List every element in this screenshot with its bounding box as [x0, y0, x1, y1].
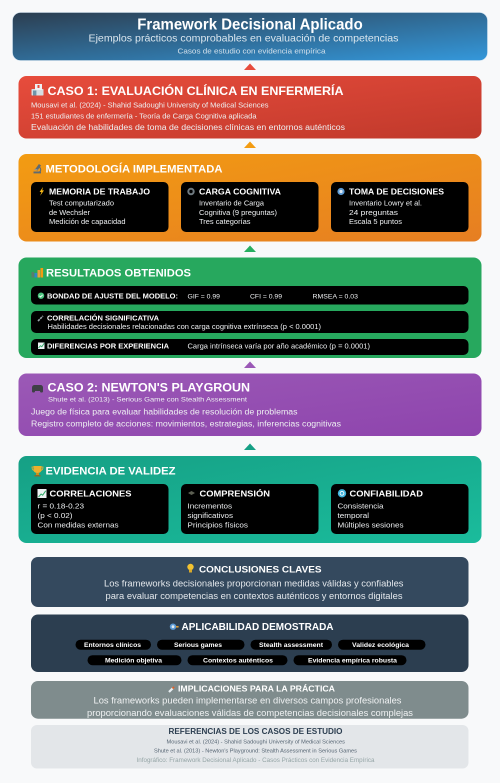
tag row 1: Serious games — [174, 642, 222, 649]
card: memoria de trabajo: de Wechsler — [49, 210, 91, 217]
panel: header — [12, 12, 488, 60]
heading: EVIDENCIA DE VALIDEZ — [46, 466, 176, 478]
icon: light bulb — [187, 564, 194, 572]
card: carga cognitiva: Tres categorías — [199, 219, 251, 226]
icon: trend chart — [38, 342, 44, 349]
card: carga cognitiva: Inventario de Carga — [199, 200, 264, 208]
tag row 2: Contextos auténticos — [203, 657, 273, 664]
footer note: Infográfico: Framework Decisional Aplicado - Casos Prácticos con Evidencia Empírica — [136, 757, 375, 764]
title: Framework Decisional Aplicado — [137, 16, 363, 33]
icon: target — [337, 188, 345, 195]
card: comprension: COMPRENSIÓN — [200, 487, 270, 498]
tag row 1 — [76, 640, 426, 650]
conclusion line 2: para evaluar competencias en contextos auténticos y entornos digitales — [106, 591, 403, 601]
card: confiabilidad — [331, 484, 468, 534]
row: correlacion significativa: CORRELACIÓN SIGNIFICATIVA — [47, 314, 159, 323]
card: confiabilidad: CONFIABILIDAD — [350, 488, 423, 498]
card: toma de decisiones: TOMA DE DECISIONES — [349, 186, 444, 196]
arrow: to evidence — [244, 444, 256, 450]
card: memoria de trabajo: MEMORIA DE TRABAJO — [49, 186, 150, 196]
tag row 1: Entornos clínicos — [84, 642, 141, 649]
panel: caso 1 — [18, 76, 482, 138]
sample: 151 estudiantes de enfermería - Teoría de Carga Cognitiva aplicada — [31, 114, 257, 120]
card: correlaciones: Con medidas externas — [38, 520, 119, 530]
row: correlacion significativa — [31, 311, 468, 333]
card: carga cognitiva: Cognitiva (9 preguntas) — [199, 210, 277, 217]
panel: aplicabilidad demostrada — [31, 614, 468, 672]
row: diferencias por experiencia: Carga intrínseca varía por año académico (p = 0.0001) — [188, 343, 370, 350]
row: bondad de ajuste: CFI = 0.99 — [250, 293, 282, 300]
panel: referencias — [31, 725, 468, 768]
card: carga cognitiva — [181, 182, 318, 232]
card: comprension: significativos — [188, 511, 233, 520]
subtitle: Ejemplos prácticos comprobables en evaluación de competencias — [88, 33, 398, 45]
card: confiabilidad: Múltiples sesiones — [338, 520, 404, 530]
icon: microscope — [34, 164, 41, 173]
heading: CONCLUSIONES CLAVES — [199, 565, 322, 576]
icon: trend chart — [38, 489, 46, 498]
card: memoria de trabajo — [31, 182, 168, 232]
card: toma de decisiones — [331, 182, 468, 232]
card: comprension: Incrementos — [188, 502, 232, 511]
implication line 2: proporcionando evaluaciones válidas de competencias decisionales complejas — [87, 708, 414, 718]
heading: CASO 2: NEWTON'S PLAYGROUN — [48, 381, 250, 395]
card: confiabilidad: Consistencia — [338, 502, 384, 511]
reference 1: Mousavi et al. (2024) - Shahid Sadoughi University of Medical Sciences — [166, 740, 345, 746]
icon: gear — [188, 189, 194, 194]
panel: resultados — [18, 258, 482, 358]
card: toma de decisiones: 24 preguntas — [349, 210, 399, 217]
tag row 1: Stealth assessment — [259, 642, 324, 649]
arrow: to results — [244, 246, 256, 252]
icon: lightning — [40, 187, 44, 196]
heading: CASO 1: EVALUACIÓN CLÍNICA EN ENFERMERÍA — [48, 83, 344, 98]
icon: graduation cap — [188, 491, 195, 495]
heading: APLICABILIDAD DEMOSTRADA — [182, 622, 334, 633]
card: comprension — [181, 484, 318, 534]
panel: metodologia — [18, 154, 482, 242]
icon: bar chart — [32, 268, 43, 278]
card: correlaciones: r = 0.18-0.23 — [38, 502, 84, 511]
icon: trophy — [32, 466, 43, 476]
icon: hospital — [32, 84, 44, 96]
icon: game controller — [32, 385, 43, 392]
caption: Casos de estudio con evidencia empírica — [178, 47, 326, 56]
implication line 1: Los frameworks pueden implementarse en diversos campos profesionales — [94, 696, 402, 706]
panel: caso 2 — [18, 374, 482, 436]
panel: evidencia de validez — [18, 456, 482, 543]
icon: link — [38, 316, 43, 321]
card: carga cognitiva: CARGA COGNITIVA — [199, 186, 281, 196]
icon: repeat — [338, 489, 346, 497]
description line 1: Juego de física para evaluar habilidades de resolución de problemas — [31, 407, 298, 416]
card: correlaciones: (p < 0.02) — [38, 511, 72, 520]
card: toma de decisiones: Inventario Lowry et al. — [349, 200, 422, 208]
description: Evaluación de habilidades de toma de decisiones clínicas en entornos auténticos — [31, 123, 345, 132]
heading: REFERENCIAS DE LOS CASOS DE ESTUDIO — [168, 727, 342, 736]
row: bondad de ajuste — [31, 286, 468, 304]
row: diferencias por experiencia — [31, 339, 468, 355]
row: bondad de ajuste: BONDAD DE AJUSTE DEL MODELO: — [47, 293, 178, 300]
card: correlaciones — [31, 484, 168, 534]
description line 2: Registro completo de acciones: movimientos, estrategias, inferencias cognitivas — [31, 420, 341, 429]
panel: conclusiones claves — [31, 557, 468, 607]
tag row 1: Validez ecológica — [352, 642, 409, 649]
panel: implicaciones para la practica — [31, 681, 468, 719]
tag row 2: Evidencia empírica robusta — [308, 657, 397, 664]
row: bondad de ajuste: GIF = 0.99 — [188, 293, 220, 300]
authors: Shute et al. (2013) - Serious Game con Stealth Assessment — [48, 396, 247, 403]
icon: rocket — [169, 687, 174, 692]
arrow: to methodology — [244, 142, 256, 148]
card: memoria de trabajo: Medición de capacidad — [49, 219, 126, 226]
arrow: to case 1 — [244, 64, 256, 70]
row: diferencias por experiencia: DIFERENCIAS POR EXPERIENCIA — [47, 343, 169, 350]
row: correlacion significativa: Habilidades decisionales relacionadas con carga cognitiva extrínseca (p < 0.0001) — [48, 324, 321, 331]
authors: Mousavi et al. (2024) - Shahid Sadoughi University of Medical Sciences — [31, 102, 269, 109]
card: memoria de trabajo: Test computarizado — [49, 200, 114, 208]
reference 2: Shute et al. (2013) - Newton's Playground: Stealth Assessment in Serious Games — [154, 749, 357, 755]
card: comprension: Principios físicos — [188, 520, 248, 530]
heading: METODOLOGÍA IMPLEMENTADA — [46, 163, 223, 176]
conclusion line 1: Los frameworks decisionales proporcionan medidas válidas y confiables — [104, 579, 404, 589]
arrow: to case 2 — [244, 362, 256, 368]
row: bondad de ajuste: RMSEA = 0.03 — [312, 293, 358, 300]
icon: target — [170, 624, 179, 630]
card: correlaciones: CORRELACIONES — [50, 488, 132, 498]
heading: RESULTADOS OBTENIDOS — [46, 268, 191, 280]
icon: check — [38, 292, 44, 299]
heading: IMPLICACIONES PARA LA PRÁCTICA — [178, 683, 335, 694]
card: confiabilidad: temporal — [338, 511, 369, 520]
tag row 2 — [88, 655, 406, 665]
card: toma de decisiones: Escala 5 puntos — [349, 219, 403, 226]
tag row 2: Medición objetiva — [105, 657, 162, 664]
